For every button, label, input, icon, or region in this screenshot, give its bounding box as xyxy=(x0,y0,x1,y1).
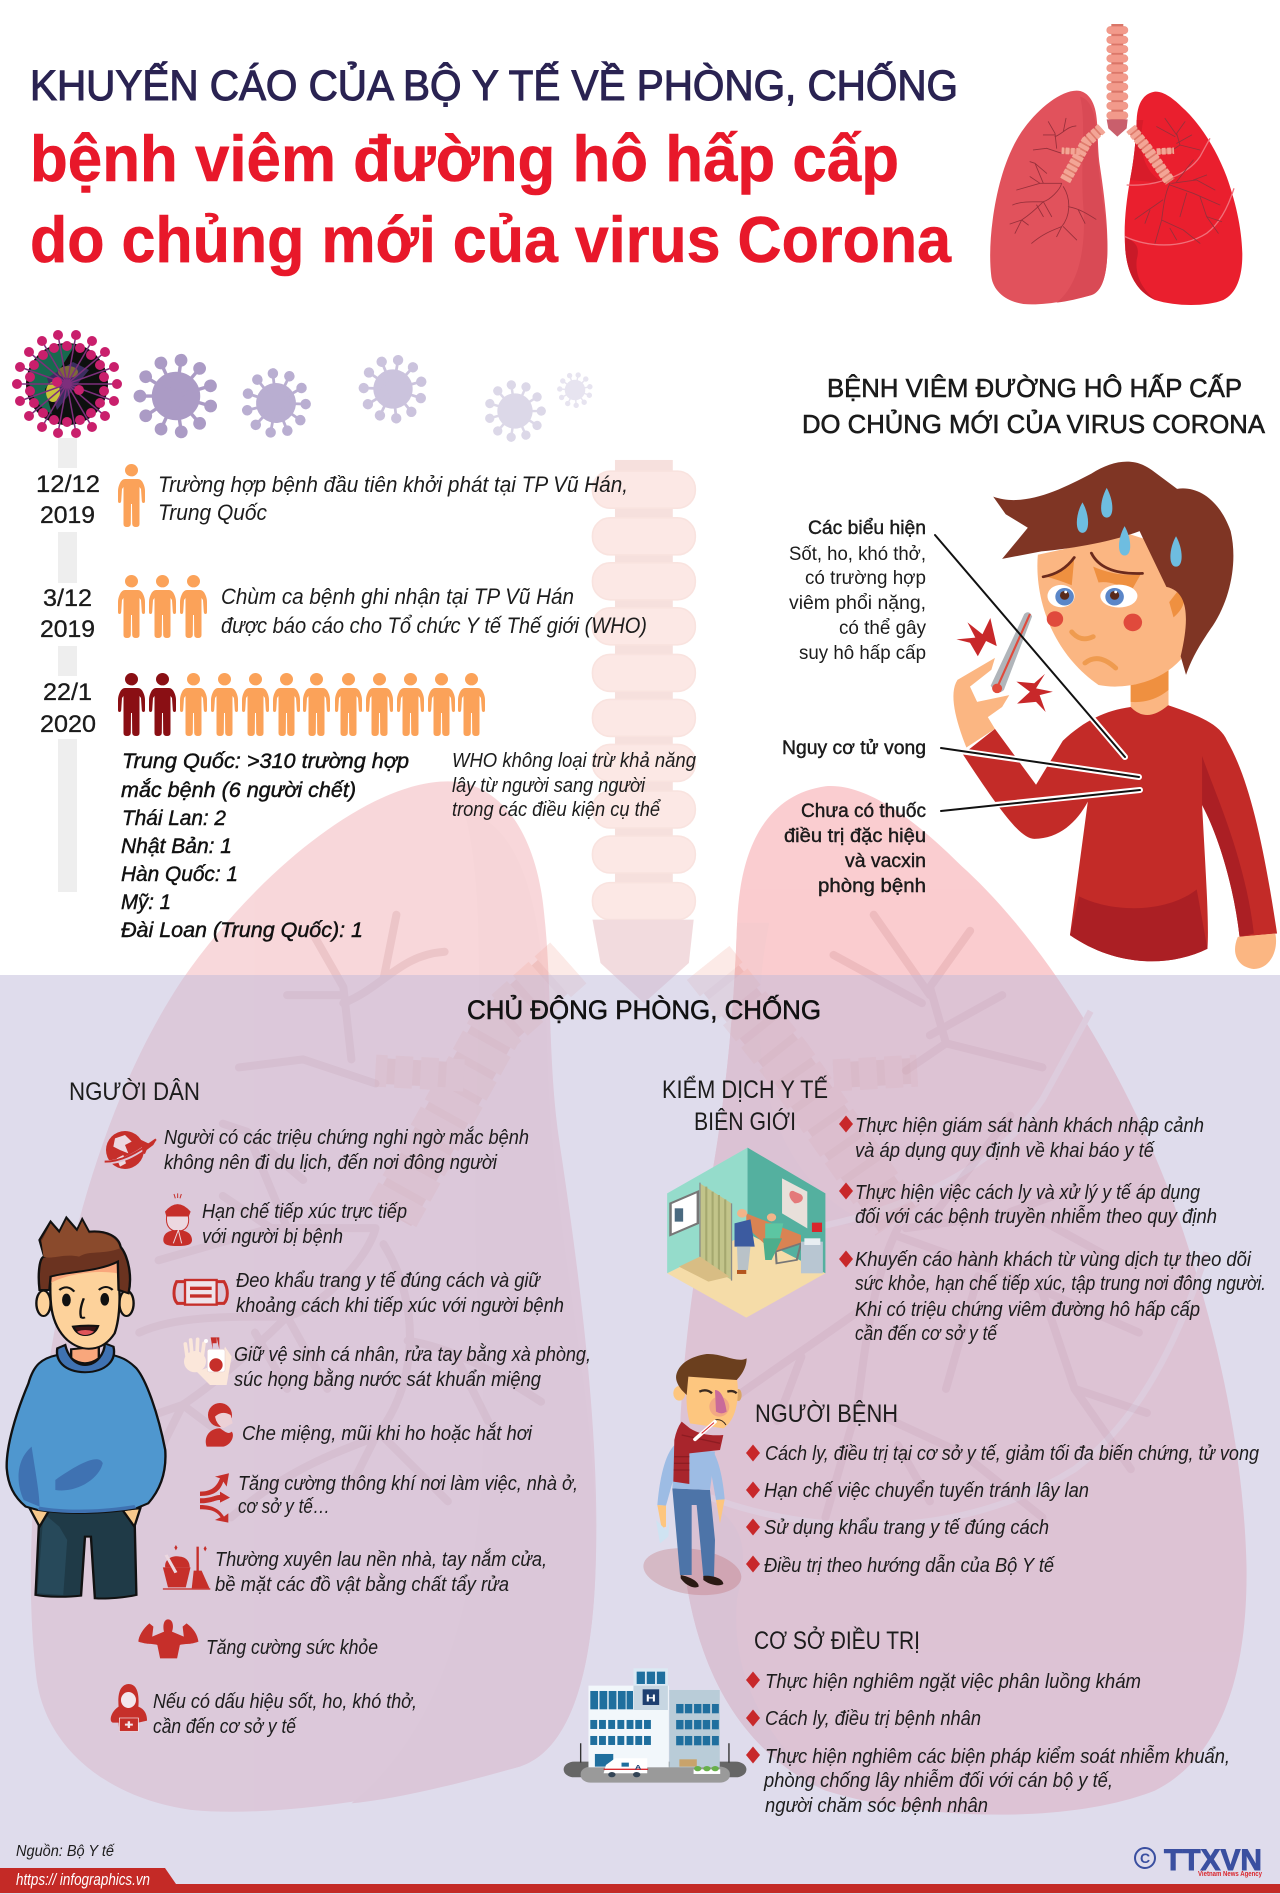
heading: border quarantine xyxy=(662,1075,828,1136)
panel: citizens xyxy=(7,1077,591,1738)
icon: doctor xyxy=(111,1684,147,1732)
callout: symptoms: suy hô hấp cấp xyxy=(799,642,926,664)
text: hygiene: Giữ vệ sinh cá nhân, rửa tay bằng xà phòng, xyxy=(234,1343,591,1366)
list: facility measures: Cách ly, điều trị bệnh nhân xyxy=(765,1708,981,1730)
text: seek care: cần đến cơ sở y tế xyxy=(153,1716,298,1738)
source: Nguồn: Bộ Y tế xyxy=(16,1843,115,1860)
text: wear mask: Đeo khẩu trang y tế đúng cách và giữ xyxy=(236,1270,541,1292)
list: quarantine measures: Khuyến cáo hành khách từ vùng dịch tự theo dõi xyxy=(855,1249,1252,1271)
text: cleaning: bề mặt các đồ vật bằng chất tẩy rửa xyxy=(215,1573,509,1596)
list: quarantine measures: cần đến cơ sở y tế xyxy=(855,1323,999,1345)
WHO note: trong các điều kiện cụ thể xyxy=(452,799,661,821)
list: facility measures: người chăm sóc bệnh nhân xyxy=(765,1795,988,1817)
icon: coronavirus row xyxy=(17,335,596,445)
timeline entry: 22/1/2020: 22/1 xyxy=(43,679,92,706)
footer bar xyxy=(0,1868,1280,1893)
panel background: prevention section xyxy=(0,975,1280,1894)
timeline entry: 12/12/2019: 12/12 xyxy=(36,471,100,498)
footer bar: https:// infographics.vn xyxy=(16,1870,150,1889)
heading: proactive prevention: CHỦ ĐỘNG PHÒNG, CHỐNG xyxy=(467,993,821,1025)
timeline entry: 3/12/2019 xyxy=(40,575,647,643)
callout: no treatment or vaccine: điều trị đặc hiệu xyxy=(784,825,926,847)
text: limit contact: Hạn chế tiếp xúc trực tiếp xyxy=(202,1201,407,1223)
icon: ventilation arrows xyxy=(200,1473,230,1523)
case counts by country xyxy=(121,750,409,942)
icon: virus silhouette 4 xyxy=(480,376,550,445)
heading: disease name xyxy=(802,373,1266,439)
illustration: hospital with ambulance: A xyxy=(635,1763,642,1771)
list: quarantine measures: Thực hiện giám sát hành khách nhập cảnh xyxy=(855,1115,1204,1137)
text: build health: Tăng cường sức khỏe xyxy=(206,1637,378,1659)
list: facility measures: phòng chống lây nhiễm đối với cán bộ y tế, xyxy=(763,1769,1113,1792)
list: quarantine measures xyxy=(839,1115,1266,1345)
icon: face mask xyxy=(174,1280,227,1305)
heading: border quarantine: BIÊN GIỚI xyxy=(694,1107,796,1136)
WHO note xyxy=(452,750,696,821)
case counts by country: Mỹ: 1 xyxy=(121,891,171,914)
icon: virus silhouette 2 xyxy=(238,365,314,440)
title: KHUYẾN CÁO CỦA BỘ Y TẾ VỀ PHÒNG, CHỐNG xyxy=(30,61,958,110)
icon: cleaning bucket and broom xyxy=(163,1545,210,1590)
timeline entry: 3/12/2019: Chùm ca bệnh ghi nhận tại TP Vũ Hán xyxy=(221,584,574,609)
timeline bar xyxy=(58,438,77,892)
title: do chủng mới của virus Corona xyxy=(30,203,952,276)
icon: red lungs xyxy=(990,24,1242,305)
panel: patients xyxy=(640,1354,1259,1601)
timeline entry: 3/12/2019: được báo cáo cho Tổ chức Y tế Thế giới (WHO) xyxy=(221,613,647,638)
icon: sick person xyxy=(163,1193,192,1246)
list: quarantine measures: Khi có triệu chứng viêm đường hô hấp cấp xyxy=(855,1299,1200,1321)
text: hygiene xyxy=(234,1343,591,1391)
callout: risk of death: Nguy cơ tử vong xyxy=(782,737,926,759)
timeline entry: 12/12/2019: Trung Quốc xyxy=(158,500,267,525)
text: wear mask: khoảng cách khi tiếp xúc với người bệnh xyxy=(236,1295,564,1317)
text: cleaning xyxy=(215,1548,547,1596)
illustration: sick man with scarf xyxy=(640,1354,747,1601)
icon: covering a cough xyxy=(206,1403,233,1447)
panel: border quarantine xyxy=(662,1075,1266,1345)
WHO note: WHO không loại trừ khả năng xyxy=(452,750,696,772)
icon: virus silhouette 3 xyxy=(354,349,433,428)
illustration: hospital with ambulance xyxy=(564,1668,746,1783)
callout: no treatment or vaccine: và vacxin xyxy=(845,850,926,872)
heading: patients: NGƯỜI BỆNH xyxy=(755,1399,898,1428)
icon: coloured coronavirus xyxy=(17,335,117,433)
case counts by country: Nhật Bản: 1 xyxy=(121,835,232,858)
callout: symptoms: có trường hợp xyxy=(805,567,926,589)
text: seek care xyxy=(153,1691,417,1738)
text: seek care: Nếu có dấu hiệu sốt, ho, khó thở, xyxy=(153,1691,417,1713)
list: quarantine measures: và áp dụng quy định về khai báo y tế xyxy=(855,1140,1156,1162)
case counts by country: Đài Loan (Trung Quốc): 1 xyxy=(121,919,363,942)
text: travel advice: không nên đi du lịch, đến nơi đông người xyxy=(164,1152,498,1174)
logo: TTXVN: Vietnam News Agency xyxy=(1198,1871,1262,1878)
text: limit contact: với người bị bệnh xyxy=(202,1226,343,1248)
icon: no travel xyxy=(104,1131,157,1169)
illustration: man in blue sweater xyxy=(7,1218,165,1599)
callout: symptoms: Sốt, ho, khó thở, xyxy=(789,543,926,565)
title xyxy=(30,61,958,276)
list: facility measures: Thực hiện nghiêm các biện pháp kiểm soát nhiễm khuẩn, xyxy=(765,1745,1230,1768)
text: cover mouth: Che miệng, mũi khi ho hoặc hắt hơi xyxy=(242,1422,533,1445)
list: quarantine measures: Thực hiện việc cách ly và xử lý y tế áp dụng xyxy=(855,1182,1200,1204)
list: patient measures: Hạn chế việc chuyển tuyến tránh lây lan xyxy=(764,1480,1089,1502)
illustration: sick boy with thermometer xyxy=(953,462,1277,969)
case counts by country: Thái Lan: 2 xyxy=(122,807,226,830)
heading: citizens: NGƯỜI DÂN xyxy=(69,1077,200,1106)
callout: no treatment or vaccine: phòng bệnh xyxy=(818,875,926,897)
icon: hand sanitizer xyxy=(184,1337,232,1385)
WHO note: lây từ người sang người xyxy=(452,775,645,797)
icon: virus silhouette 1 xyxy=(129,348,224,443)
icon: virus silhouette 5 xyxy=(554,369,596,411)
list: facility measures xyxy=(746,1671,1230,1817)
heading: disease name: DO CHỦNG MỚI CỦA VIRUS CORONA xyxy=(802,408,1266,439)
text: cleaning: Thường xuyên lau nền nhà, tay nắm cửa, xyxy=(215,1548,547,1571)
text: ventilation: cơ sở y tế… xyxy=(238,1496,330,1518)
heading: border quarantine: KIỂM DỊCH Y TẾ xyxy=(662,1075,828,1104)
heading: disease name: BỆNH VIÊM ĐƯỜNG HÔ HẤP CẤP xyxy=(827,373,1242,403)
list: quarantine measures: đối với các bệnh truyền nhiễm theo quy định xyxy=(855,1205,1217,1228)
timeline entry: 12/12/2019 xyxy=(36,464,628,529)
callout: symptoms: Các biểu hiện xyxy=(808,517,926,539)
logo: TTXVN: C xyxy=(1140,1850,1150,1866)
case counts by country: mắc bệnh (6 người chết) xyxy=(121,779,356,802)
callout leader lines xyxy=(935,535,1140,811)
watermark: large faded lungs xyxy=(31,460,1247,1815)
timeline entry: 22/1/2020 xyxy=(40,673,485,738)
text: ventilation: Tăng cường thông khí nơi làm việc, nhà ở, xyxy=(238,1473,578,1495)
case counts by country: Hàn Quốc: 1 xyxy=(121,863,238,886)
timeline entry: 12/12/2019: Trường hợp bệnh đầu tiên khởi phát tại TP Vũ Hán, xyxy=(158,472,628,497)
logo: TTXVN: TTXVN xyxy=(1164,1844,1262,1877)
callout: no treatment or vaccine xyxy=(784,800,926,897)
heading: treatment facilities: CƠ SỞ ĐIỀU TRỊ xyxy=(754,1625,920,1655)
callout: no treatment or vaccine: Chưa có thuốc xyxy=(801,800,926,822)
callout: symptoms: viêm phổi nặng, xyxy=(789,592,926,614)
text: travel advice xyxy=(164,1126,529,1174)
title: bệnh viêm đường hô hấp cấp xyxy=(30,122,899,195)
timeline entry: 22/1/2020: 2020 xyxy=(40,711,96,738)
list: facility measures: Thực hiện nghiêm ngặt việc phân luồng khám xyxy=(765,1671,1141,1693)
text: wear mask xyxy=(236,1270,564,1317)
icon: muscular figure xyxy=(138,1619,198,1658)
case counts by country: Trung Quốc: >310 trường hợp xyxy=(122,750,409,773)
illustration: isometric clinic room xyxy=(667,1148,825,1318)
list: patient measures: Sử dụng khẩu trang y tế đúng cách xyxy=(764,1517,1049,1539)
text: ventilation xyxy=(238,1473,578,1518)
text: travel advice: Người có các triệu chứng nghi ngờ mắc bệnh xyxy=(164,1126,529,1149)
text: limit contact xyxy=(202,1201,407,1248)
timeline entry: 3/12/2019: 2019 xyxy=(40,616,95,643)
list: patient measures: Điều trị theo hướng dẫn của Bộ Y tế xyxy=(764,1554,1056,1577)
callout: symptoms xyxy=(789,517,926,664)
timeline entry: 3/12/2019: 3/12 xyxy=(43,585,92,612)
text: hygiene: súc họng bằng nước sát khuẩn miệng xyxy=(234,1368,541,1391)
callout: symptoms: có thể gây xyxy=(839,617,926,639)
timeline entry: 12/12/2019: 2019 xyxy=(40,502,95,529)
illustration: hospital with ambulance: H xyxy=(646,1692,656,1704)
panel: treatment facilities xyxy=(564,1625,1230,1817)
list: patient measures xyxy=(746,1443,1259,1577)
